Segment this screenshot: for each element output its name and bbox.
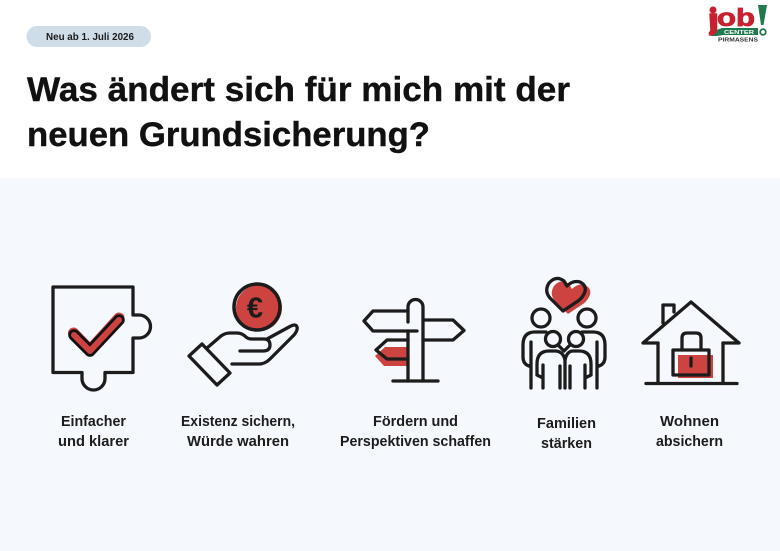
logo: jobcenter Pirmasens: ob <box>717 4 755 32</box>
date badge <box>26 26 151 47</box>
icon: signpost <box>364 300 464 381</box>
panel: light blue background <box>0 178 780 551</box>
item: Wohnen absichern <box>643 302 739 450</box>
label: Familien <box>537 416 596 432</box>
icon: house with padlock <box>643 302 739 384</box>
label: Würde wahren <box>187 434 289 450</box>
item: Existenz sichern <box>181 284 297 450</box>
label: und klarer <box>58 434 129 450</box>
logo: jobcenter Pirmasens: CENTER <box>724 30 754 36</box>
label: Perspektiven schaffen <box>340 434 491 450</box>
label: Fördern und <box>373 414 458 430</box>
title <box>27 71 570 154</box>
label <box>340 414 491 450</box>
title: Was ändert sich für mich mit der <box>27 71 570 109</box>
label <box>656 414 723 450</box>
icon: hand holding euro coin <box>189 284 297 385</box>
label <box>181 414 295 450</box>
icon: puzzle piece with check mark <box>53 287 150 390</box>
label: stärken <box>541 436 592 452</box>
label: Wohnen <box>660 414 719 430</box>
label: Einfacher <box>61 414 126 430</box>
date badge: Neu ab 1. Juli 2026 <box>46 31 134 43</box>
logo: jobcenter Pirmasens: PIRMASENS <box>718 38 759 44</box>
title: neuen Grundsicherung? <box>27 116 430 154</box>
item: Fördern und Perspektiven schaffen <box>340 300 491 450</box>
icon: hand holding euro coin: € <box>247 292 263 324</box>
label <box>537 416 596 452</box>
icon: family with heart <box>523 278 605 388</box>
label: absichern <box>656 434 723 450</box>
item: Familien stärken <box>523 278 605 452</box>
logo: jobcenter Pirmasens <box>709 4 767 44</box>
item: Einfacher und klarer <box>53 287 150 450</box>
label <box>58 414 129 450</box>
label: Existenz sichern, <box>181 414 295 430</box>
